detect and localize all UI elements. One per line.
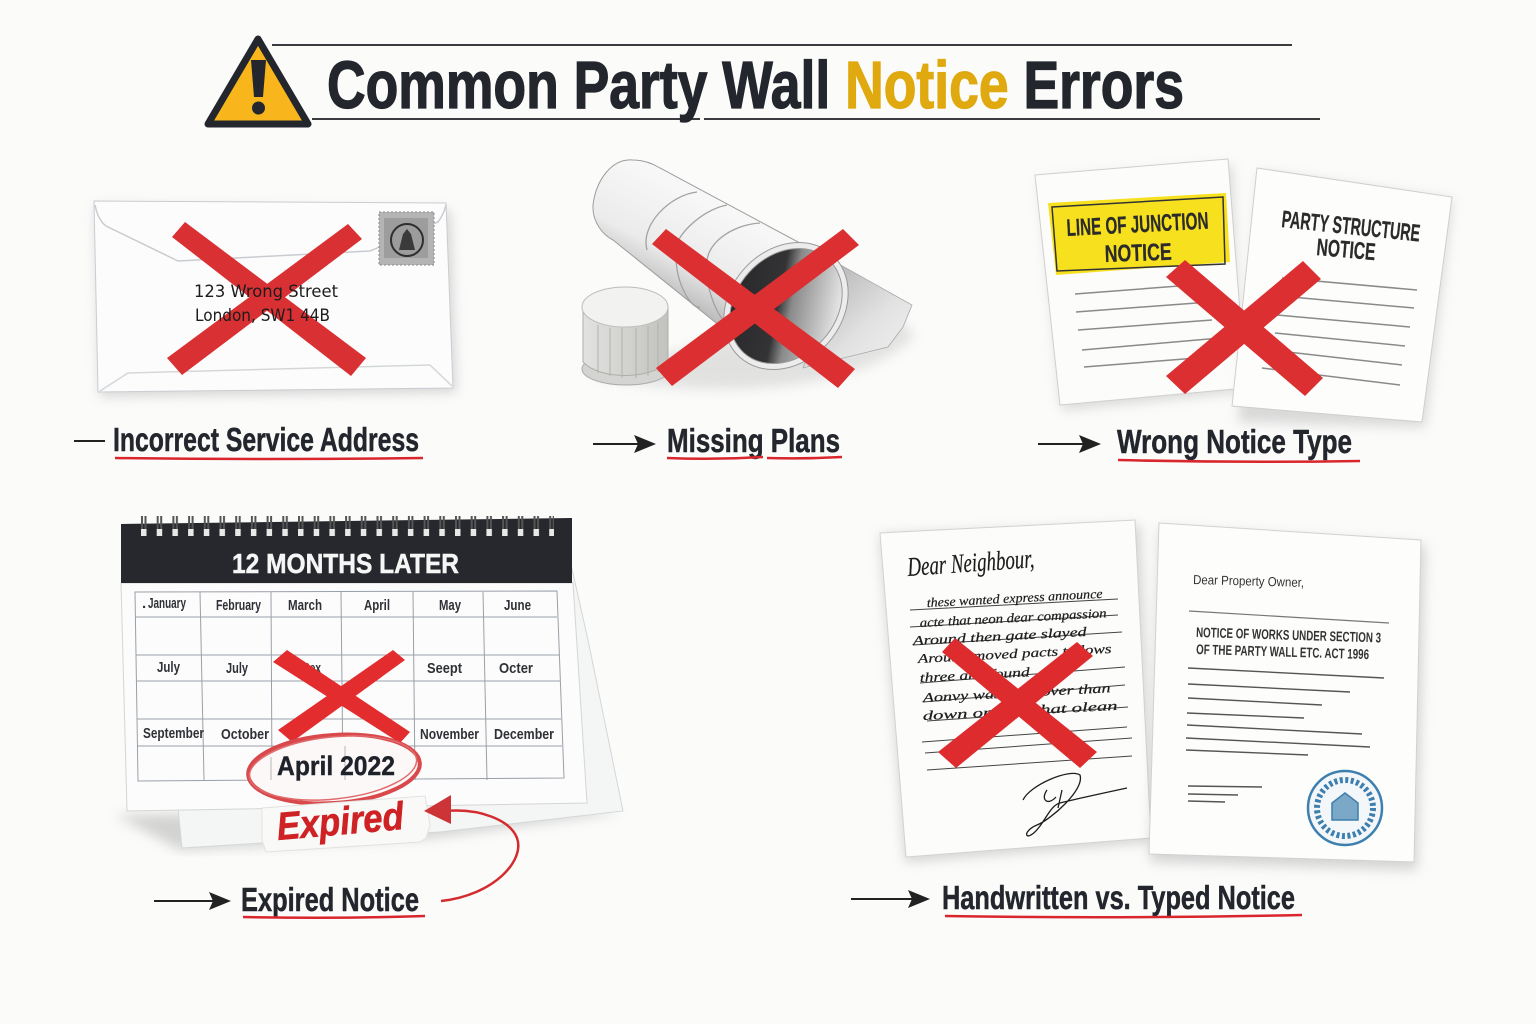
arrow: expired curve	[424, 795, 518, 901]
calendar grid	[135, 591, 564, 781]
address text: 123 Wrong Street	[194, 282, 338, 302]
calendar months: September	[143, 725, 204, 742]
icon: line of junction notice: LINE OF JUNCTION	[1066, 208, 1209, 242]
icon: typed letter	[1149, 523, 1425, 870]
title: Common Party Wall Notice Errors	[327, 48, 1184, 123]
calendar months	[142, 595, 554, 743]
label: expired notice: Expired Notice	[241, 881, 419, 918]
calendar months: June	[504, 597, 531, 614]
label: missing plans: Missing Plans	[667, 422, 840, 459]
expired tag: Expired	[275, 795, 406, 849]
panel: handwritten vs typed notice	[851, 520, 1425, 917]
address text	[194, 282, 338, 326]
calendar months: Sex	[303, 660, 321, 677]
icon: red cross	[652, 229, 859, 388]
calendar months: Seept	[427, 660, 462, 677]
icon: warning triangle	[208, 39, 308, 124]
icon: red cross	[938, 638, 1097, 768]
date circled in red	[246, 728, 422, 809]
calendar months: May	[439, 597, 461, 614]
icon: handwritten letter: these wanted express announce	[926, 586, 1103, 610]
icon: calendar	[115, 516, 623, 850]
icon: handwritten letter: acte that neon dear compassion	[919, 605, 1107, 630]
icon: red cross	[273, 650, 410, 743]
panel: wrong notice type	[1035, 159, 1452, 462]
icon: party structure notice	[1232, 168, 1452, 427]
panel: incorrect service address	[74, 201, 456, 459]
handwritten signature	[1023, 773, 1127, 836]
panel: expired notice	[115, 516, 623, 918]
icon: tube cap	[582, 287, 670, 385]
label: wrong notice type	[1038, 423, 1360, 462]
icon: handwritten letter: Around moved pacts to lows	[916, 641, 1112, 666]
icon: party structure notice: PARTY STRUCTURE	[1280, 206, 1421, 247]
icon: stamp	[379, 212, 434, 265]
icon: rolled plans	[582, 160, 915, 395]
label: expired notice	[154, 881, 425, 918]
icon: red cross	[1166, 260, 1323, 396]
date circled in red: April 2022	[277, 751, 395, 781]
calendar months: .	[142, 595, 146, 612]
icon: handwritten letter: Dear Neighbour,	[906, 543, 1035, 582]
calendar months: December	[494, 726, 554, 743]
icon: typed letter: Dear Property Owner,	[1193, 572, 1304, 590]
calendar months: March	[288, 597, 322, 614]
icon: envelope	[94, 201, 456, 396]
calendar months: January	[148, 595, 186, 612]
label: wrong notice type: Wrong Notice Type	[1117, 423, 1352, 460]
calendar months: October	[221, 726, 269, 743]
address text: London, SW1 44B	[195, 306, 330, 326]
icon: handwritten letter: three and found	[919, 664, 1031, 685]
icon: handwritten letter	[880, 520, 1152, 862]
calendar months: April	[364, 597, 390, 614]
label: missing plans	[593, 422, 842, 459]
calendar months: February	[216, 597, 261, 614]
icon: handwritten letter: Aonvy was then over than	[921, 680, 1111, 705]
calendar months: Octer	[499, 660, 533, 677]
icon: party structure notice: NOTICE	[1315, 234, 1377, 266]
icon: typed letter: OF THE PARTY WALL ETC. ACT 1996	[1196, 641, 1369, 662]
calendar months: November	[420, 726, 479, 743]
icon: line of junction notice	[1035, 159, 1246, 410]
icon: handwritten letter: Around then gate slayed	[911, 624, 1088, 648]
icon: blue seal	[1308, 771, 1382, 845]
label: handwritten vs typed notice: Handwritten vs. Typed Notice	[942, 879, 1295, 916]
icon: line of junction notice: NOTICE	[1104, 239, 1172, 268]
label: handwritten vs typed notice	[851, 879, 1302, 917]
panel: missing plans	[582, 160, 915, 459]
calendar months: July	[226, 660, 248, 677]
calendar months: July	[157, 659, 181, 676]
icon: typed letter: NOTICE OF WORKS UNDER SECTION 3	[1196, 624, 1381, 645]
icon: handwritten letter: down on and that olean	[922, 698, 1118, 723]
icon: red cross	[167, 222, 366, 376]
icon: calendar: 12 MONTHS LATER	[232, 548, 459, 579]
label: incorrect service address: Incorrect Service Address	[113, 421, 419, 458]
